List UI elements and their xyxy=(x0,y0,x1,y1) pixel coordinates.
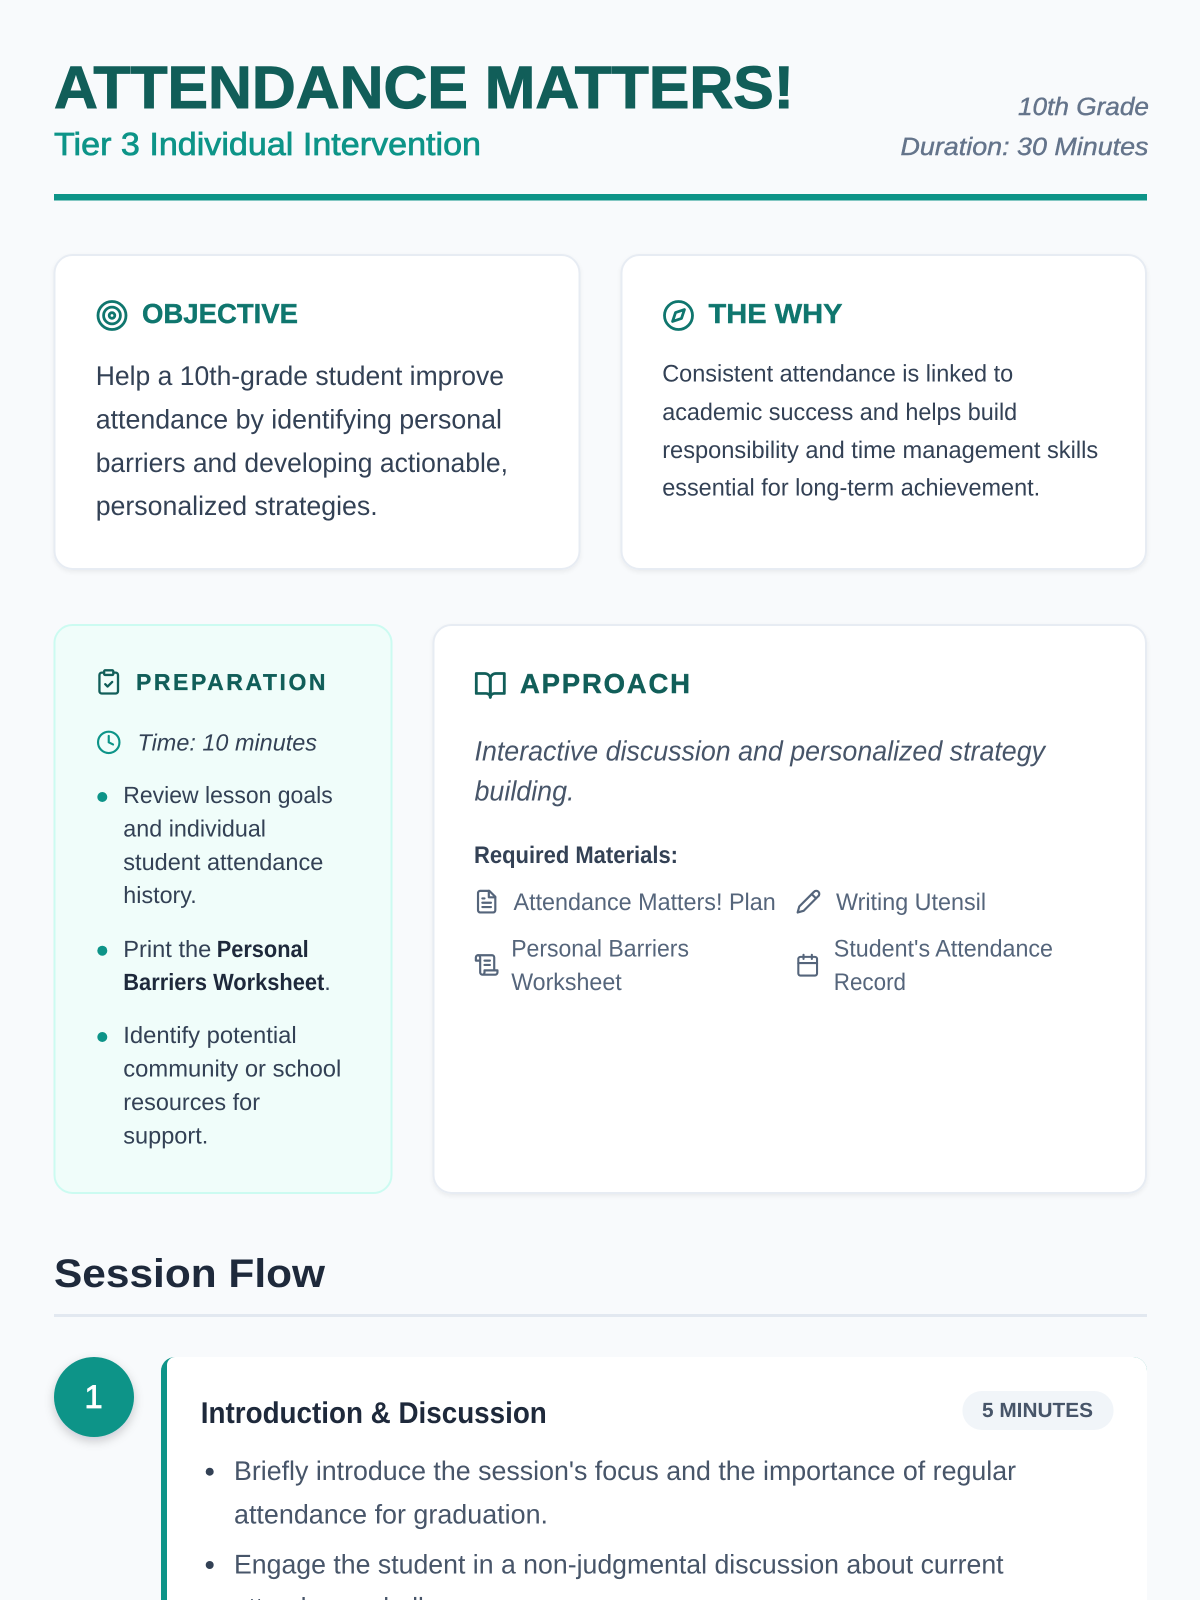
objective text xyxy=(96,361,508,521)
preparation bullet 1: student attendance xyxy=(123,849,323,875)
preparation heading: PREPARATION xyxy=(136,669,326,695)
session flow heading: Session Flow xyxy=(54,1252,326,1296)
preparation bullet 3: community or school xyxy=(123,1056,341,1082)
objective heading: OBJECTIVE xyxy=(142,298,298,329)
icon: clock xyxy=(98,732,119,753)
approach description: Interactive discussion and personalized strategy xyxy=(474,736,1047,766)
approach heading: APPROACH xyxy=(520,668,690,699)
step bullet 1 xyxy=(206,1456,1016,1529)
icon: compass xyxy=(664,302,692,330)
preparation time: Time: 10 minutes xyxy=(138,730,317,756)
preparation bullet 1: Review lesson goals xyxy=(123,782,333,808)
preparation bullet 2: Personal xyxy=(217,936,309,962)
material: plan: Attendance Matters! Plan xyxy=(514,889,776,916)
why text: Consistent attendance is linked to xyxy=(662,361,1013,388)
panel: preparation xyxy=(54,625,392,1193)
preparation bullet 3: support. xyxy=(123,1122,208,1148)
why text: responsibility and time management skills xyxy=(662,437,1098,464)
material: worksheet: Worksheet xyxy=(511,969,622,996)
material: worksheet xyxy=(476,936,689,996)
objective text: Help a 10th-grade student improve xyxy=(96,361,504,391)
step number badge xyxy=(54,1357,134,1437)
panel: approach xyxy=(434,625,1146,1193)
title: ATTENDANCE MATTERS! xyxy=(54,54,794,121)
preparation bullet 1 xyxy=(97,782,333,908)
subtitle: Tier 3 Individual Intervention xyxy=(54,126,481,162)
why text xyxy=(662,361,1098,502)
objective text: attendance by identifying personal xyxy=(96,404,502,434)
step bullet 2 xyxy=(206,1549,1004,1600)
preparation bullet 1: history. xyxy=(123,882,197,908)
icon: target xyxy=(98,302,126,330)
material: worksheet: Personal Barriers xyxy=(511,936,689,963)
preparation bullet 2: Barriers Worksheet xyxy=(123,969,324,995)
panel: objective xyxy=(54,255,580,569)
icon: clipboard check xyxy=(99,670,118,694)
material: attendance record: Record xyxy=(834,969,906,996)
step bullet 1: attendance for graduation. xyxy=(234,1499,548,1529)
preparation bullet 3: resources for xyxy=(123,1089,260,1115)
preparation bullet 3: Identify potential xyxy=(123,1022,297,1048)
approach description xyxy=(474,736,1047,806)
header xyxy=(54,54,1149,162)
icon: book open xyxy=(476,673,504,697)
approach description: building. xyxy=(474,776,574,806)
panel: the why xyxy=(622,255,1146,569)
time badge xyxy=(962,1391,1114,1430)
step bullet 1: Briefly introduce the session's focus and the importance of regular xyxy=(234,1456,1016,1486)
panel: step 1 introduction and discussion xyxy=(161,1357,1147,1600)
preparation bullet 2: Print the xyxy=(123,936,211,962)
duration label: Duration: 30 Minutes xyxy=(900,133,1148,161)
step title: Introduction & Discussion xyxy=(201,1397,547,1430)
required materials heading: Required Materials: xyxy=(474,842,678,869)
why text: essential for long-term achievement. xyxy=(662,474,1040,502)
preparation bullet 3 xyxy=(97,1022,341,1148)
step bullet 2: Engage the student in a non-judgmental discussion about current xyxy=(234,1549,1004,1579)
preparation bullet 2: . xyxy=(324,969,331,995)
objective text: personalized strategies. xyxy=(96,491,378,521)
preparation bullet 2 xyxy=(97,936,331,995)
step number badge: 1 xyxy=(84,1378,103,1415)
why text: academic success and helps build xyxy=(662,399,1017,426)
material: attendance record: Student's Attendance xyxy=(834,936,1053,963)
material: attendance record xyxy=(798,936,1053,996)
material: writing utensil: Writing Utensil xyxy=(836,889,986,916)
grade label: 10th Grade xyxy=(1018,93,1149,121)
preparation bullet 1: and individual xyxy=(123,816,266,842)
objective text: barriers and developing actionable, xyxy=(96,448,508,478)
time badge: 5 MINUTES xyxy=(982,1399,1093,1422)
why heading: THE WHY xyxy=(708,298,842,329)
